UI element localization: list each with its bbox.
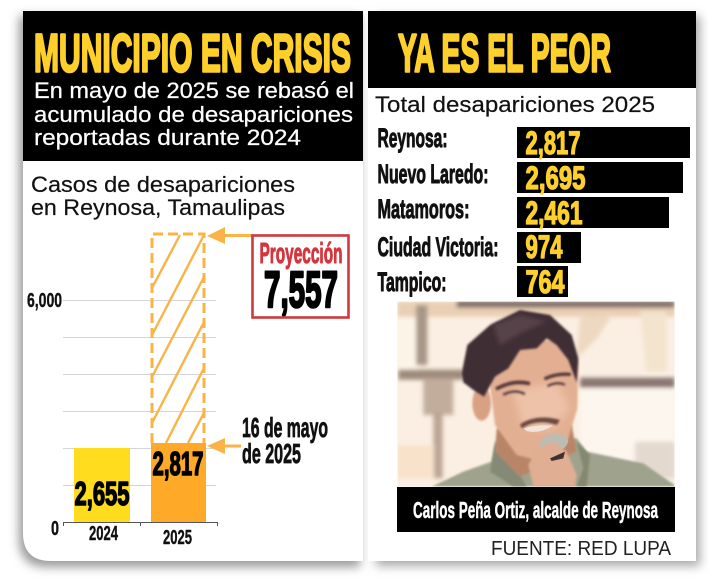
header block: right <box>368 11 696 88</box>
subtitle <box>34 78 354 150</box>
source: FUENTE: RED LUPA <box>491 538 672 560</box>
header block: left <box>23 11 363 161</box>
axis labels <box>27 290 192 549</box>
arrow: projection <box>207 227 252 244</box>
row: matamoros <box>378 194 669 231</box>
row: tampico: 764 <box>526 264 565 300</box>
axis labels: 0 <box>51 518 59 540</box>
row: tampico <box>378 264 568 300</box>
subtitle: acumulado de desapariciones <box>34 102 353 127</box>
row: ciudad victoria: Ciudad Victoria: <box>378 232 498 262</box>
chart heading: Casos de desapariciones <box>31 172 295 197</box>
axis labels: 2025 <box>163 527 192 549</box>
value 2024: 2,655 <box>74 475 130 512</box>
subtitle: En mayo de 2025 se rebasó el <box>34 78 354 103</box>
annotation: date: 16 de mayo <box>242 412 328 443</box>
hair <box>462 310 578 397</box>
panel: ya es el peor <box>368 11 696 561</box>
row: matamoros: Matamoros: <box>378 194 470 224</box>
row: reynosa: 2,817 <box>526 125 580 161</box>
row: ciudad victoria: 974 <box>526 229 563 265</box>
bar chart: cases <box>27 234 218 549</box>
row: matamoros: 2,461 <box>526 195 582 231</box>
row: tampico: Tampico: <box>378 267 446 297</box>
shirt <box>432 438 675 487</box>
caption <box>397 487 675 532</box>
panel: municipio en crisis <box>23 11 363 561</box>
axis labels: 2024 <box>89 523 119 545</box>
callout: proyeccion: Proyección <box>260 238 342 270</box>
title: municipio en crisis: MUNICIPIO EN CRISIS <box>34 24 351 84</box>
ranking bars <box>378 123 690 300</box>
value 2025: 2,817 <box>152 445 204 482</box>
chart heading: en Reynosa, Tamaulipas <box>31 195 285 220</box>
annotation: date: de 2025 <box>242 438 301 469</box>
brows and eyes <box>497 374 569 394</box>
arrow: 16 de mayo <box>207 438 241 454</box>
callout: proyeccion <box>252 236 348 318</box>
axis labels: 6,000 <box>27 290 62 312</box>
bar 2025 <box>151 443 206 522</box>
subtitle: reportadas durante 2024 <box>34 125 301 150</box>
neck and face <box>495 425 577 477</box>
projection bar 2025 <box>152 234 204 443</box>
annotation: date <box>242 412 328 469</box>
subtitle: total: Total desapariciones 2025 <box>375 92 655 117</box>
row: nuevo laredo: 2,695 <box>526 160 586 196</box>
row: nuevo laredo <box>378 159 683 196</box>
chart heading <box>31 172 295 220</box>
photo: portrait of the mayor <box>397 301 675 487</box>
hand and microphone <box>538 434 568 450</box>
bar 2024 <box>74 448 130 522</box>
callout: proyeccion: 7,557 <box>264 261 338 318</box>
row: nuevo laredo: Nuevo Laredo: <box>378 159 488 189</box>
row: reynosa <box>378 123 690 161</box>
row: reynosa: Reynosa: <box>378 123 448 153</box>
mouth <box>520 417 560 428</box>
